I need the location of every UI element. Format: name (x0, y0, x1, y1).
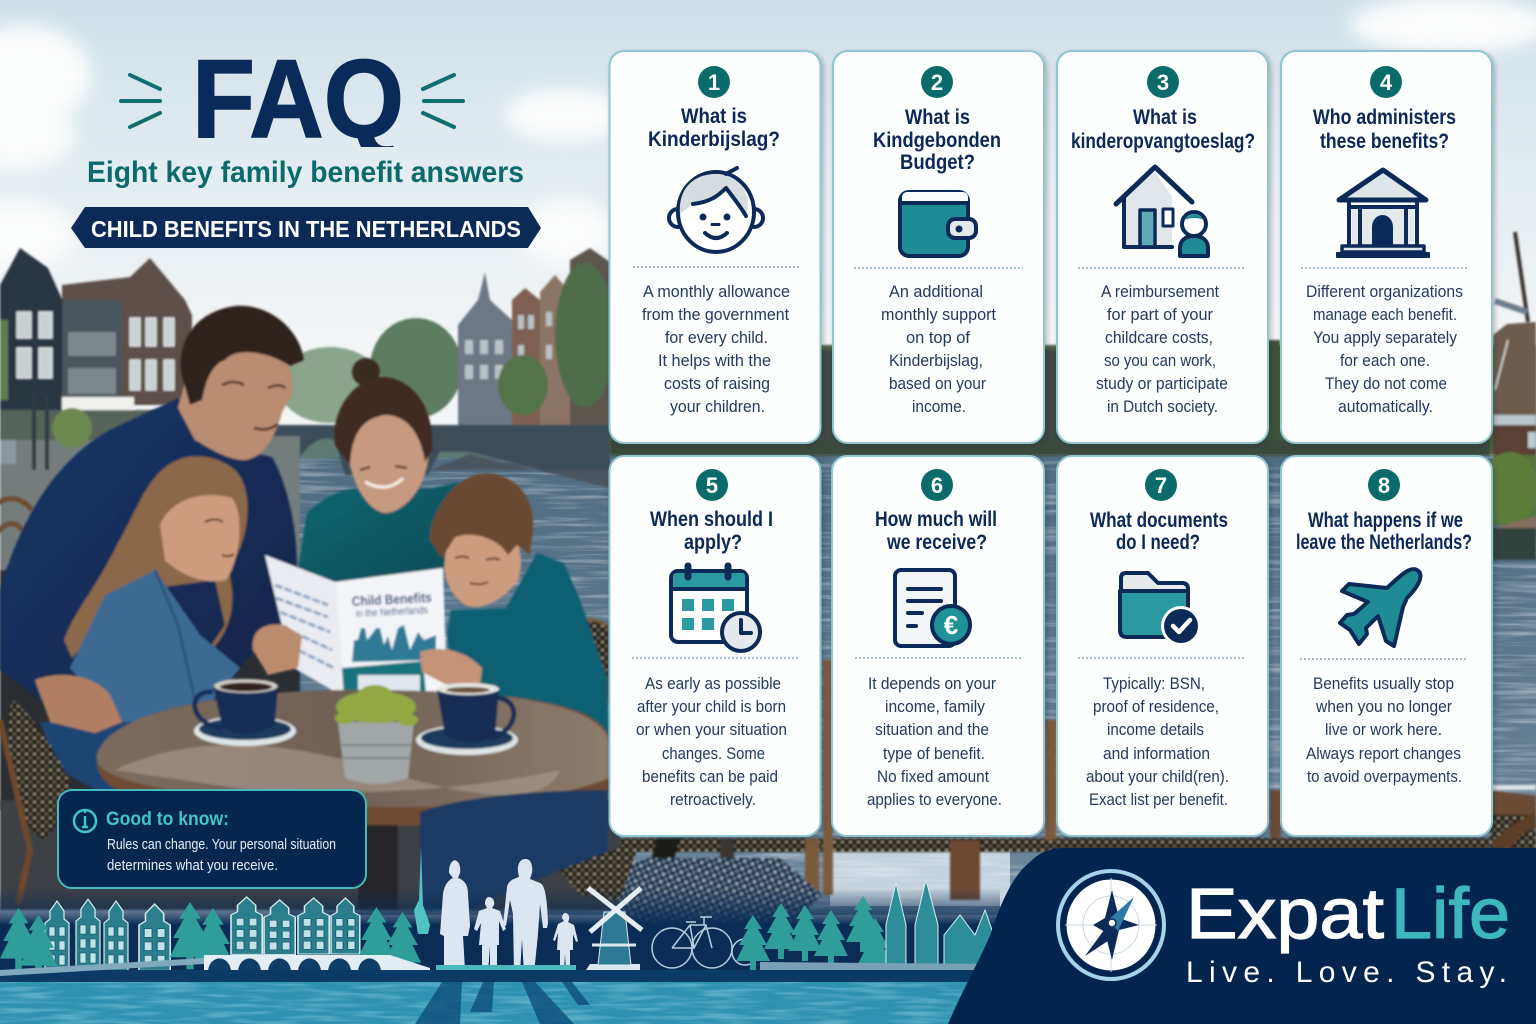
answer 8: Always report changes (1306, 744, 1461, 763)
brochure (265, 555, 344, 697)
number 1 (698, 66, 730, 98)
icon: document with euro: € (944, 610, 958, 640)
question 8 (1296, 509, 1472, 554)
answer 3: A reimbursement (1101, 282, 1219, 301)
answer 2: on top of (906, 328, 970, 347)
number 3: 3 (1157, 70, 1169, 95)
number 7: 7 (1155, 473, 1167, 498)
question 3: What is (1133, 106, 1197, 129)
question 8: leave the Netherlands? (1296, 531, 1472, 554)
question 2: Kindgebonden (873, 129, 1001, 152)
panel: FAQ 3 (1057, 51, 1268, 443)
question 6: we receive? (886, 531, 987, 554)
answer 1: from the government (642, 305, 789, 324)
answer 2 (881, 282, 996, 416)
number 4: 4 (1380, 70, 1393, 95)
question 6: How much will (875, 508, 997, 531)
far side cafe furniture behind cards (610, 660, 1490, 928)
left canal houses (0, 248, 300, 810)
coffee cup left (194, 716, 296, 746)
answer 7: Exact list per benefit. (1089, 790, 1228, 809)
question 7: What documents (1090, 509, 1228, 532)
answer 4: for each one. (1340, 351, 1430, 370)
answer 6: No fixed amount (877, 767, 989, 786)
answer 7: Typically: BSN, (1103, 674, 1205, 693)
number 7 (1145, 469, 1177, 501)
woman (296, 482, 459, 585)
answer 6: type of benefit. (883, 744, 985, 763)
far trees and canal buildings (278, 248, 1536, 456)
left trees (0, 902, 421, 977)
answer 8: when you no longer (1315, 697, 1452, 716)
callout: good to know: determines what you receive. (107, 858, 278, 874)
number 8: 8 (1378, 473, 1390, 498)
logo panel: ExpatLife: Live. Love. Stay. (1186, 956, 1507, 989)
icon: document with euro (895, 570, 970, 646)
answer 5: changes. Some (662, 744, 765, 763)
answer 1: for every child. (665, 328, 768, 347)
answer 8: Benefits usually stop (1313, 674, 1454, 693)
question 5 (650, 508, 773, 554)
question 7: do I need? (1116, 531, 1200, 554)
answer 5 (636, 674, 787, 809)
answer 4: They do not come (1325, 374, 1447, 393)
answer 1: A monthly allowance (643, 282, 790, 301)
plant pot (338, 722, 414, 784)
bottom skyline illustration (0, 847, 1000, 1024)
question 7 (1090, 509, 1228, 554)
panel: FAQ 8 (1281, 456, 1492, 836)
icon: folder with checkmark (1120, 573, 1201, 646)
number 1: 1 (708, 70, 720, 95)
panel: FAQ 2 (833, 51, 1044, 443)
answer 3: childcare costs, (1105, 328, 1213, 347)
table (97, 690, 610, 826)
man's neck and head (178, 339, 292, 460)
answer 7: and information (1103, 744, 1210, 763)
number 6: 6 (931, 473, 943, 498)
banner: child benefits (71, 207, 541, 248)
left rays (121, 75, 160, 127)
family silhouette (436, 859, 578, 974)
right trees (736, 896, 892, 974)
panel: FAQ 5 (610, 456, 820, 836)
question 1: What is (681, 105, 747, 128)
answer 3 (1096, 282, 1228, 416)
answer 7: income details (1107, 720, 1204, 739)
right rays (423, 75, 463, 127)
answer 2: monthly support (881, 305, 996, 324)
answer 6: income, family (885, 697, 985, 716)
answer 3: study or participate (1096, 374, 1228, 393)
question 4: Who administers (1313, 106, 1456, 129)
question 2: Budget? (900, 151, 975, 174)
icon: wallet (900, 192, 976, 256)
tower spire (414, 847, 430, 934)
answer 2: based on your (889, 374, 986, 393)
girl (64, 456, 248, 658)
answer 3: so you can work, (1104, 351, 1216, 370)
left woven chair (9, 700, 75, 840)
canal water (280, 455, 1536, 915)
answer 6: situation and the (875, 720, 989, 739)
number 4 (1370, 66, 1402, 98)
windmill (586, 888, 642, 970)
question 3 (1071, 106, 1255, 153)
canal bridge and quay (260, 425, 610, 488)
man's body (0, 398, 297, 740)
family photo: parents and two children reading brochure at cafe table (0, 306, 640, 910)
panel: FAQ 4 (1281, 51, 1492, 443)
question 3: kinderopvangtoeslag? (1071, 130, 1255, 153)
answer 2: An additional (889, 282, 983, 301)
answer 5: retroactively. (670, 790, 756, 809)
callout: good to know: Good to know: (106, 809, 229, 830)
coffee cup right (416, 725, 518, 755)
answer 4 (1306, 282, 1463, 416)
title: FAQ: FAQ (192, 37, 404, 161)
right chair back (583, 620, 610, 700)
logo panel: ExpatLife (948, 848, 1536, 1024)
logo panel: ExpatLife: Life (1391, 875, 1510, 954)
question 8: What happens if we (1308, 509, 1463, 532)
dark foreground floor (0, 800, 620, 910)
answer 4: Different organizations (1306, 282, 1463, 301)
icon: airplane (1340, 569, 1420, 646)
family photo: parents and two children reading brochure at cafe table: in the Netherlands (356, 604, 428, 620)
answer 5: benefits can be paid (642, 767, 778, 786)
panel: FAQ 7 (1057, 456, 1268, 836)
answer 5: or when your situation (636, 720, 787, 739)
logo panel: ExpatLife: Expat (1186, 875, 1384, 954)
number 2 (921, 66, 953, 98)
icon: house with person (1116, 167, 1208, 256)
callout: good to know: Rules can change. Your personal situation (107, 837, 336, 853)
answer 6: applies to everyone. (867, 790, 1002, 809)
callout: good to know (58, 790, 366, 888)
answer 6 (867, 674, 1002, 809)
question 2: What is (905, 106, 970, 129)
answer 5: As early as possible (645, 674, 781, 693)
answer 1: It helps with the (658, 351, 771, 370)
panel: FAQ 6 (832, 456, 1044, 836)
man's hand on girl (35, 675, 122, 733)
answer 1: your children. (670, 397, 765, 416)
answer 4: manage each benefit. (1313, 305, 1457, 324)
icon: calendar with clock (671, 566, 760, 651)
number 3 (1147, 66, 1179, 98)
number 5: 5 (706, 473, 718, 498)
hands on brochure (253, 624, 302, 675)
question 4: these benefits? (1320, 130, 1449, 153)
boy (447, 553, 608, 735)
answer 2: income. (912, 397, 966, 416)
answer 7: proof of residence, (1093, 697, 1219, 716)
banner: child benefits: CHILD BENEFITS IN THE NETHERLANDS (91, 216, 521, 242)
answer 5: after your child is born (637, 697, 786, 716)
question 1: Kinderbijslag? (648, 128, 780, 151)
right side windmill and trees (1482, 232, 1536, 851)
question 5: apply? (684, 531, 742, 554)
icon: compass logo (1058, 871, 1164, 979)
icon: info (74, 810, 96, 832)
answer 1: costs of raising (664, 374, 770, 393)
bicycle (652, 917, 758, 968)
answer 3: in Dutch society. (1107, 397, 1218, 416)
answer 6: It depends on your (868, 674, 996, 693)
answer 7: about your child(ren). (1086, 767, 1229, 786)
title: FAQ (119, 58, 465, 147)
answer 4: automatically. (1338, 397, 1433, 416)
number 8 (1368, 469, 1400, 501)
answer 8: to avoid overpayments. (1307, 767, 1462, 786)
answer 1 (642, 282, 790, 416)
question 5: When should I (650, 508, 773, 531)
question 2 (873, 106, 1001, 174)
left houses (45, 897, 360, 971)
canal bridge (204, 955, 430, 980)
icon: government building (1337, 170, 1429, 257)
number 6 (921, 469, 953, 501)
family photo: parents and two children reading brochure at cafe table: Child Benefits (351, 590, 432, 609)
answer 8: live or work here. (1325, 720, 1442, 739)
answer 2: Kinderbijslag, (889, 351, 983, 370)
question 6 (875, 508, 997, 554)
number 2: 2 (931, 70, 943, 95)
question 4 (1313, 106, 1456, 153)
icon: child face (669, 168, 763, 252)
water strip with reflections (0, 958, 1000, 1024)
answer 3: for part of your (1107, 305, 1213, 324)
number 5 (696, 469, 728, 501)
panel: FAQ 1 (610, 51, 820, 443)
answer 7 (1086, 674, 1229, 809)
answer 8 (1306, 674, 1462, 786)
subtitle: Eight key family benefit answers (87, 156, 524, 189)
left cafe chairs (0, 499, 32, 540)
answer 4: You apply separately (1313, 328, 1457, 347)
right towers and houses (886, 880, 992, 975)
question 1 (648, 105, 780, 151)
woven chair cushion (612, 858, 822, 928)
clouds (0, 0, 1536, 269)
